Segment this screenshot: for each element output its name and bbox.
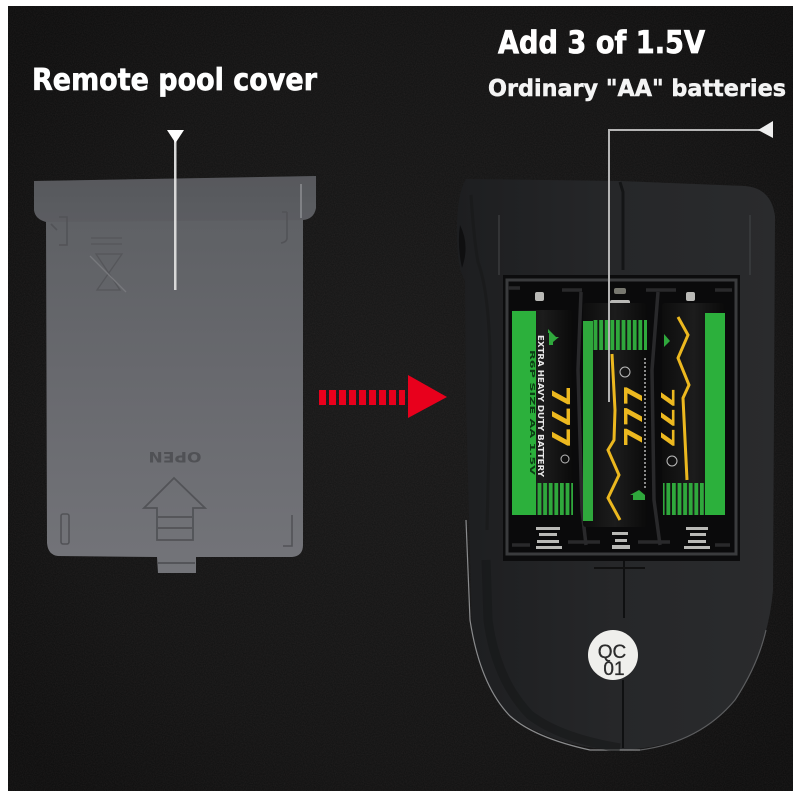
battery: middle: 777 <box>619 385 648 447</box>
label: QC 01 sticker: QC <box>598 642 626 663</box>
heading: remote pool cover: Remote pool cover <box>32 63 317 98</box>
panel: battery cover <box>34 176 316 573</box>
arrow: red dashed pointer <box>319 375 447 418</box>
battery: left: EXTRA HEAVY DUTY BATTERY <box>536 335 545 477</box>
battery: left: R6P SIZE AA 1.5V <box>528 350 536 476</box>
panel: battery compartment <box>503 275 740 561</box>
battery: left: 777 <box>546 386 575 448</box>
cover moulded slots <box>51 184 301 563</box>
OPEN label: OPEN <box>148 448 202 464</box>
callout: cover pointer line <box>167 130 184 290</box>
cover body <box>34 176 316 573</box>
side notch <box>459 225 466 268</box>
battery springs <box>535 288 710 549</box>
remote rim highlights <box>466 182 766 750</box>
battery: left <box>512 310 575 515</box>
remote body <box>457 179 775 750</box>
cover top band shading <box>34 176 316 222</box>
battery holder ribs <box>508 288 732 545</box>
panel: remote control <box>457 179 775 750</box>
icon: crossed-out bin mark <box>90 238 126 292</box>
battery: right: 777 <box>656 388 678 448</box>
label: QC 01 sticker <box>588 630 638 680</box>
label: QC 01 sticker: 01 <box>603 659 625 680</box>
heading: add 3 of 1.5V: Add 3 of 1.5V <box>498 25 705 61</box>
heading: ordinary AA batteries: Ordinary "AA" batteries <box>488 76 786 102</box>
icon: embossed arrow <box>144 478 205 540</box>
battery: middle <box>583 303 648 527</box>
battery: right <box>656 303 725 515</box>
callout: battery pointer line <box>609 121 773 402</box>
